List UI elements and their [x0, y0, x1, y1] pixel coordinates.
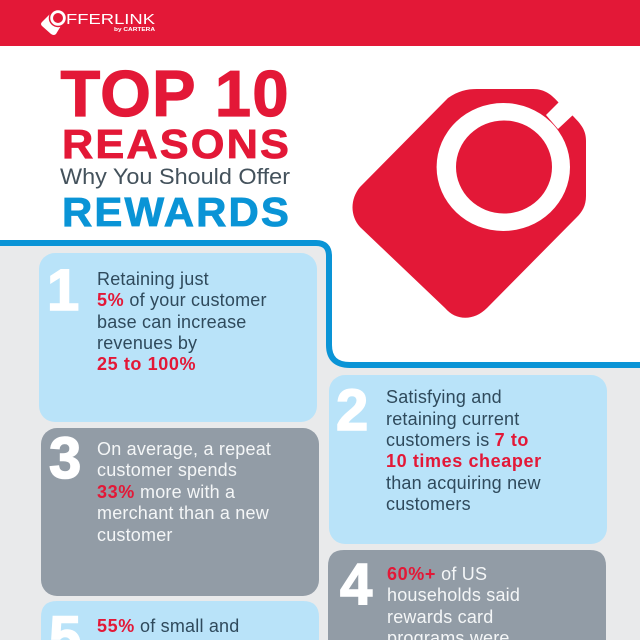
card 4	[328, 550, 606, 640]
card 1: 25 to 100%	[97, 354, 196, 374]
card 5: 55% of small and	[97, 616, 239, 636]
title	[60, 57, 291, 235]
card 4: rewards card	[387, 607, 493, 627]
header bar	[0, 0, 640, 46]
title: Why You Should Offer	[60, 164, 291, 189]
logo: Offerlink by Cartera: by CARTERA	[114, 27, 155, 33]
title: TOP 10	[60, 57, 288, 130]
card 1: Retaining just	[97, 269, 209, 289]
title: REWARDS	[62, 189, 291, 235]
card 3: 33% more with a	[97, 482, 236, 502]
card 3: customer spends	[97, 460, 237, 480]
card 4: 60%+ of US	[387, 564, 487, 584]
card 4: 4	[340, 552, 372, 617]
card 3	[41, 426, 319, 596]
card 3: merchant than a new	[97, 503, 270, 523]
blue divider line	[0, 243, 640, 365]
card 1: 1	[47, 258, 79, 323]
card 3: On average, a repeat	[97, 439, 271, 459]
logo: Offerlink by Cartera	[41, 10, 155, 35]
card 1: 5% of your customer	[97, 290, 267, 310]
card 2: Satisfying and	[386, 387, 502, 407]
icon: red price tag	[352, 89, 586, 318]
card 4: households said	[387, 585, 520, 605]
card 3: customer	[97, 525, 173, 545]
logo: Offerlink by Cartera: FFERLINK	[66, 11, 155, 28]
card 5	[41, 601, 319, 640]
card 2: 2	[336, 378, 368, 443]
card 2: customers	[386, 494, 471, 514]
card 1	[39, 253, 317, 422]
card 2: 10 times cheaper	[386, 451, 542, 471]
title: REASONS	[62, 121, 291, 167]
card 2	[329, 375, 607, 544]
card 2: retaining current	[386, 409, 519, 429]
card 1: base can increase	[97, 312, 246, 332]
card 2: customers is 7 to	[386, 430, 529, 450]
card 2: than acquiring new	[386, 473, 542, 493]
card 3: 3	[49, 426, 81, 491]
card 1: revenues by	[97, 333, 197, 353]
